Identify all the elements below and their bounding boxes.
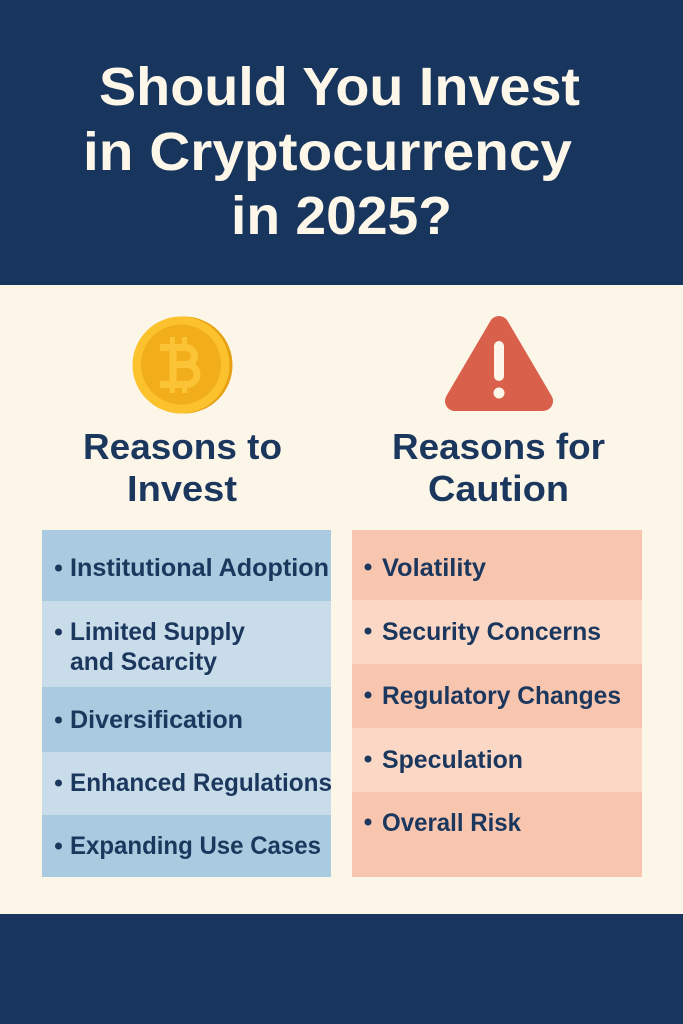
panel: reasons for caution list [352,530,642,877]
heading: reasons for caution: Caution [428,468,569,509]
title [83,57,580,246]
heading: reasons to invest [83,426,282,509]
panel: reasons to invest list: Institutional Adoption [70,554,329,582]
icon: warning triangle [455,326,543,401]
footer band [0,914,683,1024]
title: in 2025? [231,186,452,246]
heading: reasons to invest: Invest [127,468,237,509]
panel: reasons to invest list: and Scarcity [70,648,217,676]
panel: reasons for caution list: Volatility [382,554,486,582]
panel: reasons for caution list: Regulatory Changes [382,682,621,710]
heading: reasons to invest: Reasons to [83,426,282,467]
panel: reasons for caution list: Speculation [382,746,523,774]
icon: bitcoin coin [132,316,232,414]
panel: reasons to invest list [42,530,332,877]
heading: reasons for caution [392,426,605,509]
heading: reasons for caution: Reasons for [392,426,605,467]
panel: reasons to invest list: Expanding Use Cases [70,832,321,860]
header band [0,0,683,285]
panel: reasons to invest list: Enhanced Regulations [70,769,332,797]
panel: reasons to invest list: Limited Supply [70,618,245,646]
panel: reasons for caution list: Security Concerns [382,618,601,646]
panel: reasons to invest list: Diversification [70,706,243,734]
title: Should You Invest [99,57,580,117]
title: in Cryptocurrency [83,122,572,182]
panel: reasons for caution list: Overall Risk [382,809,521,837]
